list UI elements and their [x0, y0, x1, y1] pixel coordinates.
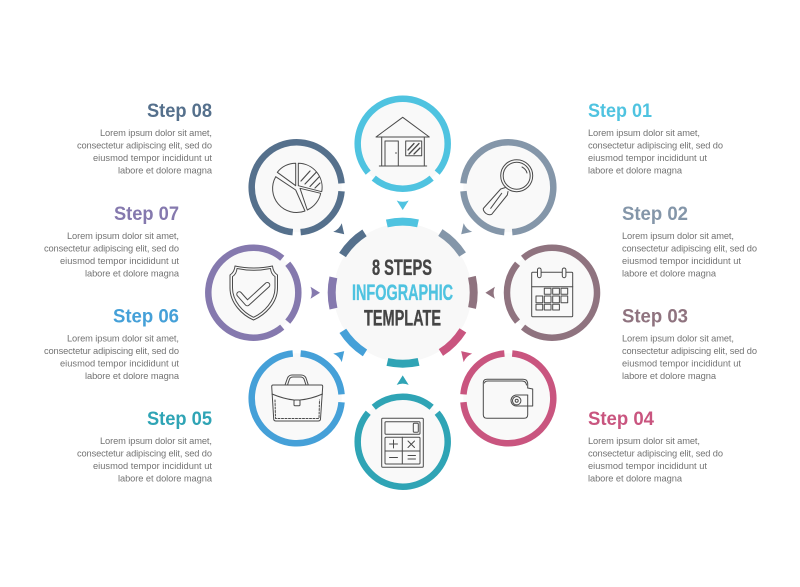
text: step 03: Lorem ipsum dolor sit amet,	[622, 334, 734, 344]
step 02 circle with magnifier icon	[460, 139, 557, 236]
text: step 02: eiusmod tempor incididunt ut	[622, 256, 741, 266]
hub title: 8 STEPS	[372, 255, 432, 280]
arrows pointing to hub	[310, 200, 495, 385]
text: step 03: Step 03	[622, 306, 688, 328]
step 07 circle with shield icon	[190, 229, 317, 356]
text: step 08	[77, 101, 213, 176]
text: step 05: consectetur adipiscing elit, sed do	[77, 448, 212, 458]
hub title: INFOGRAPHIC	[352, 280, 453, 305]
text: step 05: Step 05	[147, 409, 212, 430]
text: step 04	[588, 409, 723, 484]
text: step 07	[44, 204, 180, 278]
central hub	[305, 195, 501, 391]
icon: calendar	[532, 268, 573, 317]
icon: pie chart	[273, 163, 322, 213]
text: step 04: eiusmod tempor incididunt ut	[588, 461, 707, 471]
text: step 04: consectetur adipiscing elit, sed do	[588, 448, 723, 458]
text: step 05	[77, 409, 213, 484]
text: step 01: Lorem ipsum dolor sit amet,	[588, 128, 700, 138]
text: step 07: Lorem ipsum dolor sit amet,	[67, 231, 179, 241]
text: step 08: Lorem ipsum dolor sit amet,	[100, 128, 212, 138]
text: step 04: Step 04	[588, 409, 654, 430]
icon: shield	[230, 266, 278, 320]
text: step 03	[622, 306, 757, 381]
text: step 07: Step 07	[114, 204, 179, 225]
text: step 06: consectetur adipiscing elit, sed do	[44, 346, 179, 356]
step 01 circle with house icon	[339, 80, 466, 207]
hub disc	[334, 224, 472, 362]
icon: calculator	[382, 418, 423, 467]
text: step 07: eiusmod tempor incididunt ut	[60, 256, 179, 266]
text: step 02: labore et dolore magna	[622, 268, 717, 278]
text: step 06: Step 06	[113, 306, 179, 328]
step 05 circle with calculator icon	[339, 378, 466, 505]
text: step 08: Step 08	[147, 101, 212, 122]
icon: wallet	[483, 379, 533, 418]
text: step 05: eiusmod tempor incididunt ut	[93, 461, 212, 471]
text: step 02: Lorem ipsum dolor sit amet,	[622, 231, 734, 241]
text: step 06: Lorem ipsum dolor sit amet,	[67, 334, 179, 344]
text: step 02	[622, 204, 757, 278]
text: step 06	[44, 306, 180, 381]
text: step 01: eiusmod tempor incididunt ut	[588, 153, 707, 163]
hub title	[352, 255, 453, 330]
text: step 01: consectetur adipiscing elit, sed do	[588, 141, 723, 151]
step 04 circle with wallet icon	[460, 350, 557, 447]
step 03 circle with calendar icon	[489, 229, 615, 356]
text: step 07: consectetur adipiscing elit, sed do	[44, 244, 179, 254]
step 06 circle with briefcase icon	[248, 350, 345, 447]
text: step 01: labore et dolore magna	[588, 166, 683, 176]
step 08 circle with pie chart icon	[248, 139, 345, 236]
hub title: TEMPLATE	[364, 306, 441, 330]
text: step 04: labore et dolore magna	[588, 474, 683, 484]
text: step 03: eiusmod tempor incididunt ut	[622, 358, 741, 368]
text: step 04: Lorem ipsum dolor sit amet,	[588, 436, 700, 446]
hub arc segments	[305, 195, 501, 391]
text: step 08: labore et dolore magna	[118, 166, 213, 176]
icon: briefcase	[272, 375, 323, 421]
text: step 01: Step 01	[588, 101, 652, 122]
text: step 07: labore et dolore magna	[85, 268, 180, 278]
text: step 01	[588, 101, 723, 176]
text: step 05: Lorem ipsum dolor sit amet,	[100, 436, 212, 446]
text: step 02: consectetur adipiscing elit, sed do	[622, 244, 757, 254]
text: step 06: labore et dolore magna	[85, 371, 180, 381]
icon: house	[376, 117, 429, 166]
text: step 02: Step 02	[622, 204, 688, 225]
text: step 08: consectetur adipiscing elit, sed do	[77, 141, 212, 151]
icon: magnifier	[483, 160, 533, 215]
text: step 06: eiusmod tempor incididunt ut	[60, 358, 179, 368]
text: step 03: consectetur adipiscing elit, sed do	[622, 346, 757, 356]
text: step 03: labore et dolore magna	[622, 371, 717, 381]
text: step 05: labore et dolore magna	[118, 474, 213, 484]
text: step 08: eiusmod tempor incididunt ut	[93, 153, 212, 163]
